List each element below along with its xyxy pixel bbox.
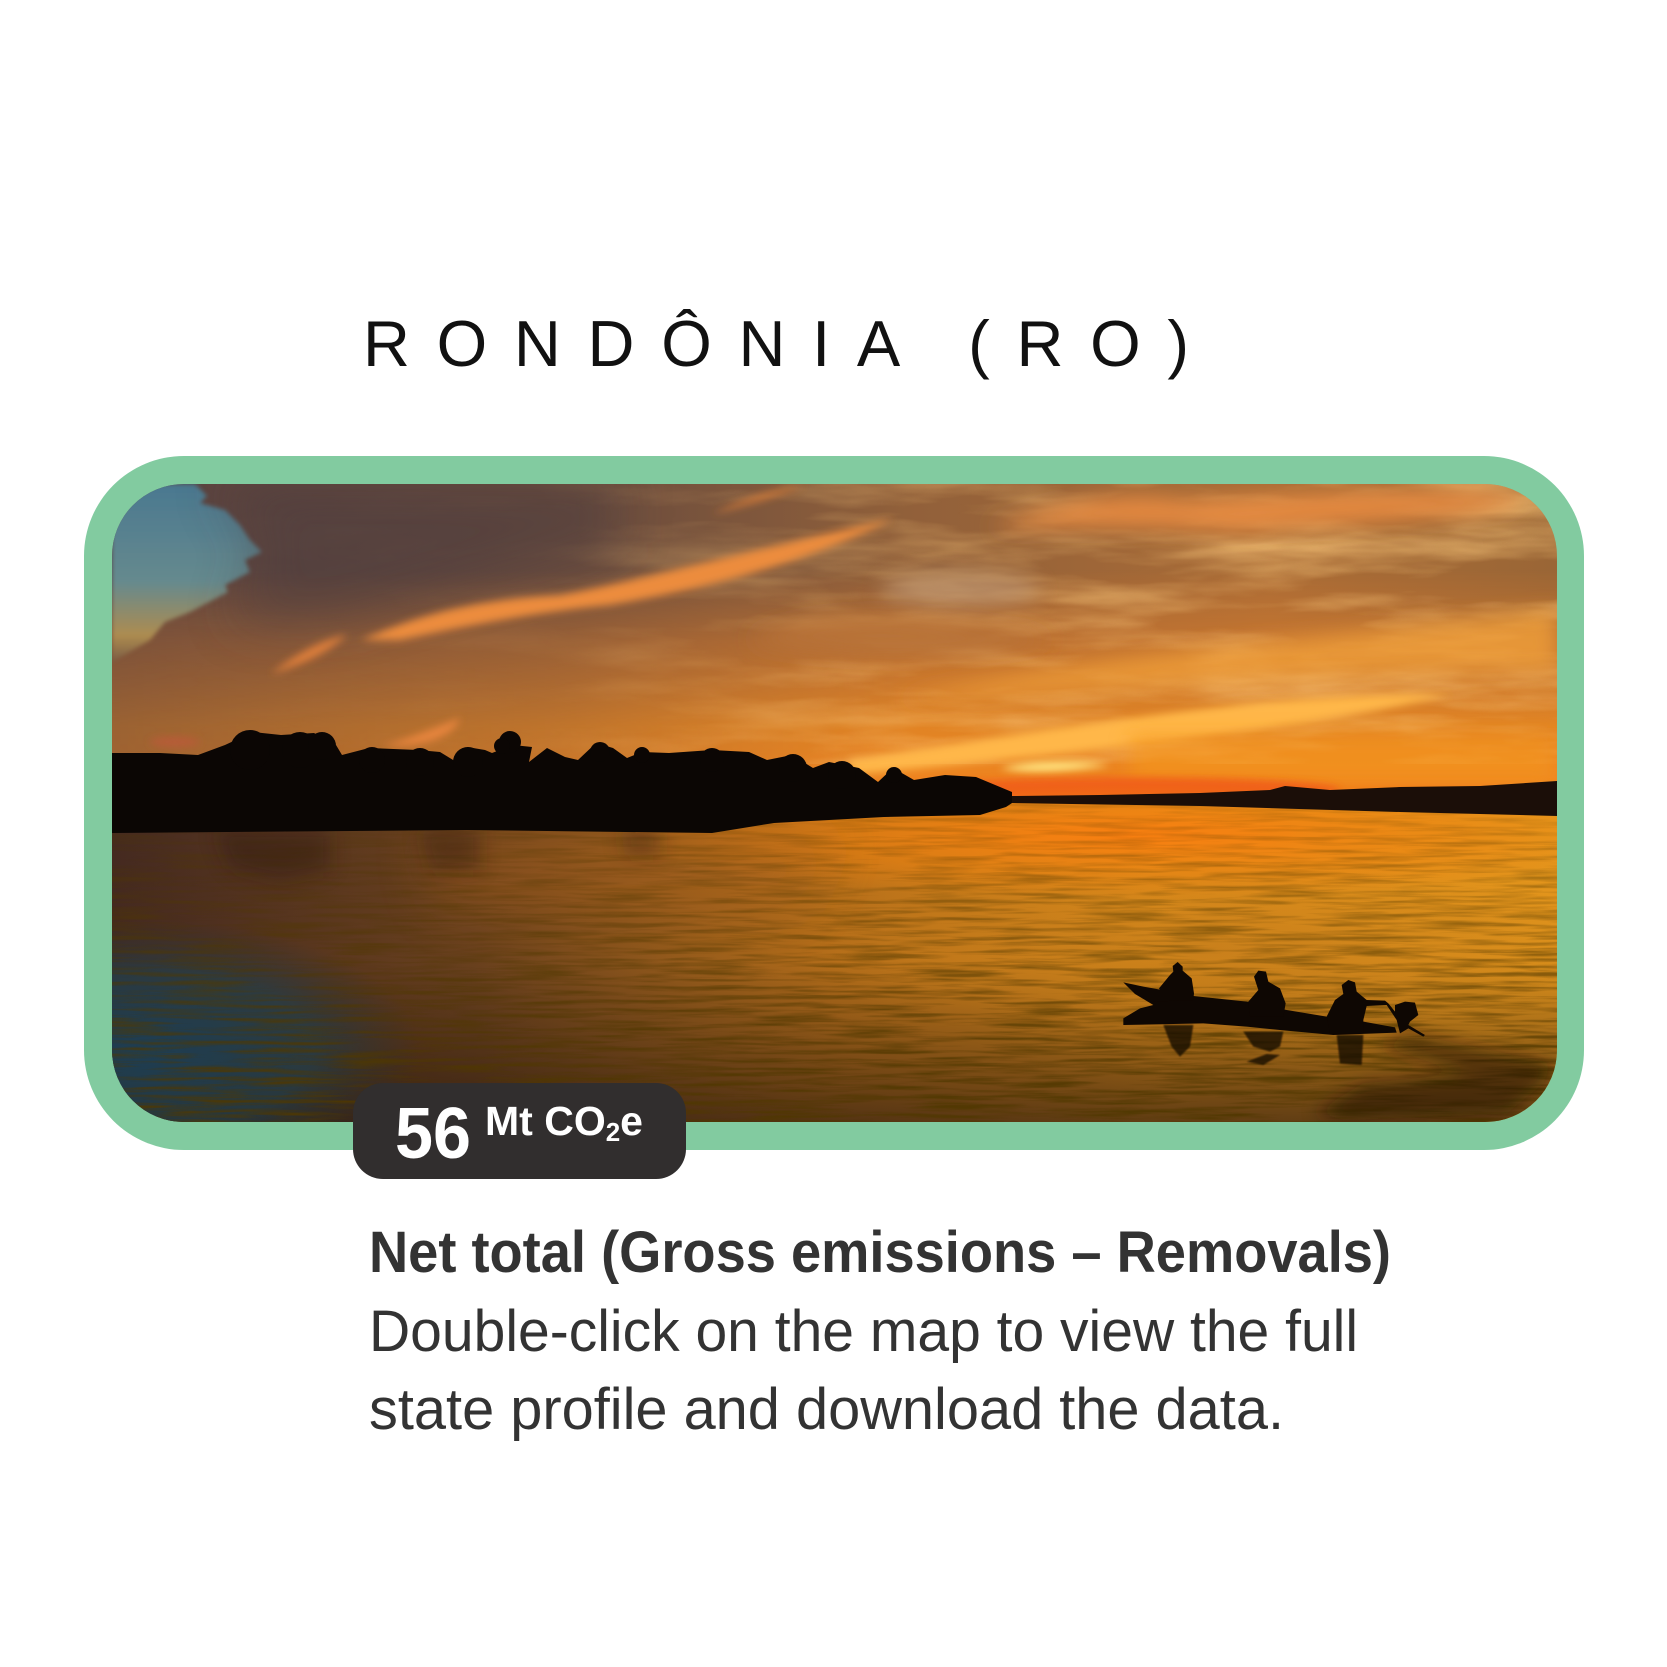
line 2: Double-click on the map to view the full [369, 1299, 1358, 1364]
text block: description [369, 1220, 1391, 1442]
hull [1123, 982, 1397, 1035]
forest silhouette [112, 730, 1012, 833]
reflections [1163, 1025, 1363, 1065]
title: RONDÔNIA (RO) [363, 307, 1189, 380]
far treeline [1012, 781, 1557, 816]
person 2 [1248, 970, 1286, 1010]
canoe with three people [1123, 962, 1552, 1120]
unit: e [620, 1098, 643, 1144]
line 3: state profile and download the data. [369, 1377, 1284, 1442]
unit: Mt CO [485, 1098, 606, 1144]
person 3 with outboard motor [1327, 980, 1425, 1037]
unit: 2 [606, 1117, 620, 1147]
sky [112, 484, 1557, 814]
panel: photo frame [84, 456, 1584, 1150]
badge: net total value [353, 1083, 686, 1179]
person 1 [1159, 962, 1194, 996]
wake shadow [1313, 1033, 1552, 1120]
river water [112, 782, 1557, 1122]
value: 56 [395, 1094, 471, 1174]
frame border [84, 456, 1584, 1150]
heading: Net total (Gross emissions – Removals) [369, 1220, 1391, 1285]
photo: river at sunset [112, 484, 1557, 1122]
